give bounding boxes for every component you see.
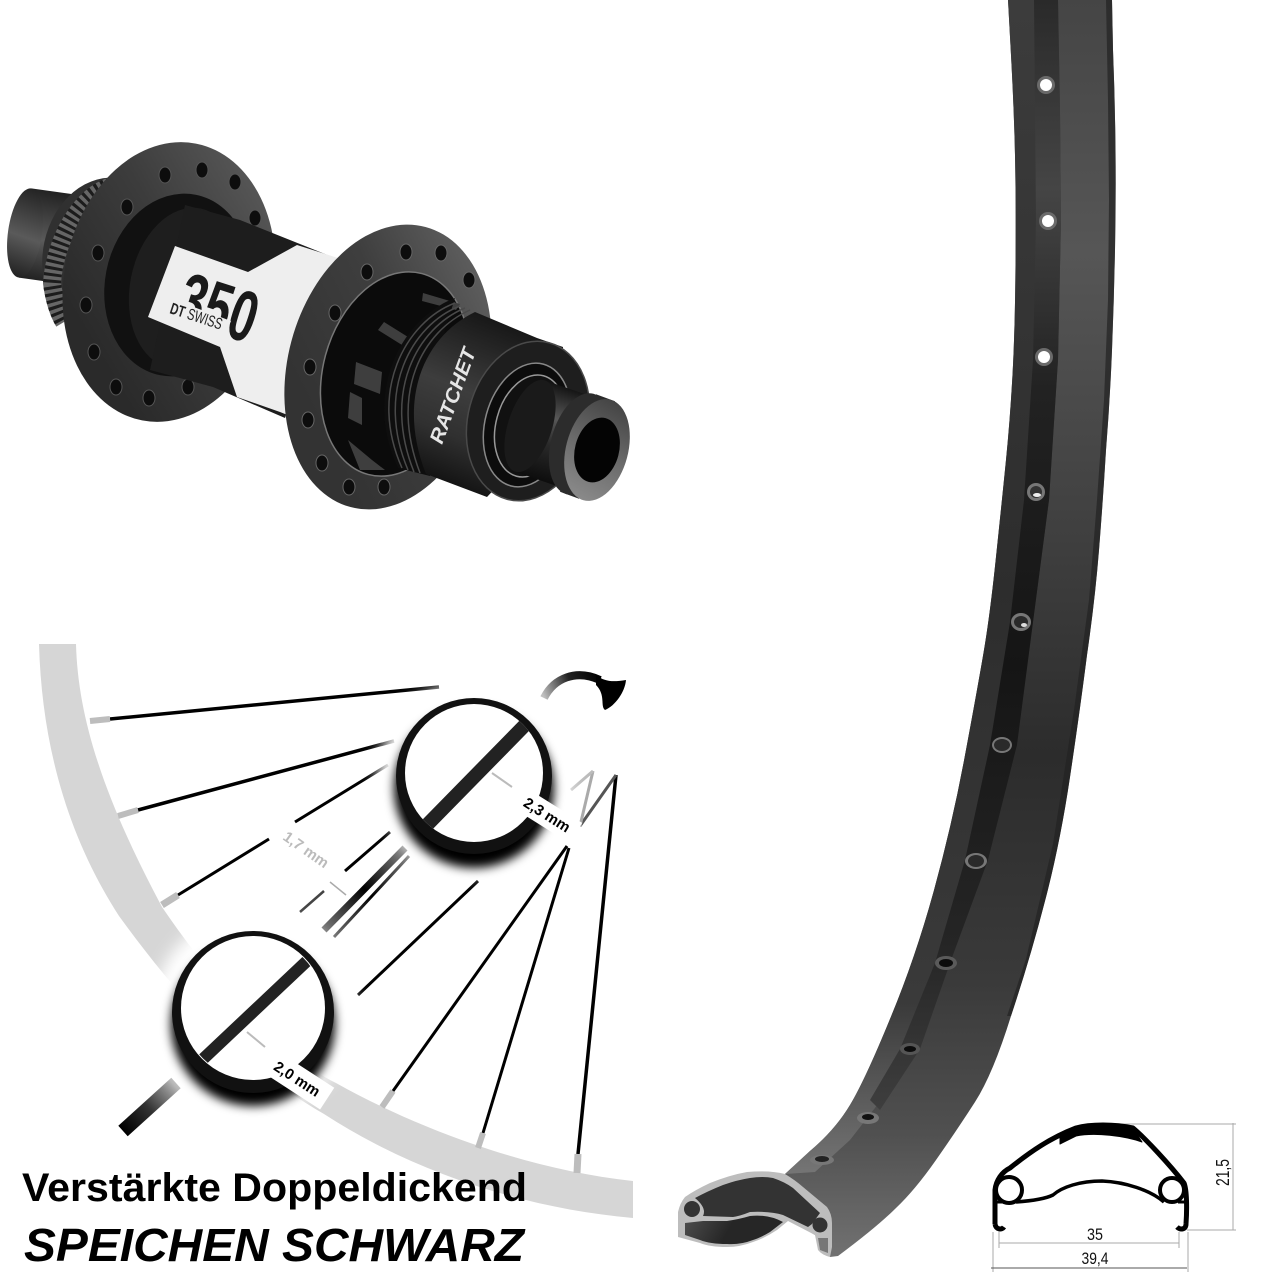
hub axle end left: [2, 186, 75, 280]
magnifier lens 2,0 mm: [171, 931, 335, 1110]
zigzag spoke bend: [571, 771, 616, 826]
hub barrel: [150, 205, 335, 418]
spokes: [90, 687, 616, 1173]
spoke 5: [382, 846, 567, 1107]
rim cross section: [678, 1171, 832, 1257]
rim left flank: [785, 0, 1061, 1174]
dimension 21,5: 21,5: [1213, 1159, 1233, 1186]
fade halos: [153, 682, 570, 1112]
logo 350: 350: [168, 257, 268, 358]
spoke thin section: [300, 832, 390, 912]
label 1,7 mm: 1,7 mm: [280, 828, 332, 872]
rim spoke holes: [810, 76, 1057, 1165]
freehub body: [384, 298, 563, 497]
spoke 3: [162, 765, 388, 905]
rim right edge: [1007, 0, 1116, 1016]
label 2,0 mm: [260, 1048, 334, 1110]
grey rim arc: [39, 644, 633, 1218]
label 2,3 mm: [512, 787, 582, 843]
freehub pawl ring: [299, 255, 491, 493]
label 2,3 mm: 2,3 mm: [520, 795, 573, 836]
spoke diagram: [39, 644, 633, 1218]
axle tube: [494, 374, 640, 508]
spoke 4: [358, 881, 478, 995]
label 2,0 mm: 2,0 mm: [270, 1058, 323, 1101]
rim photo: [678, 0, 1116, 1257]
threaded spoke end: [123, 1083, 176, 1131]
white sleeve with logo: [148, 245, 338, 420]
right flange: [254, 201, 522, 533]
left flange: [39, 124, 299, 440]
magnifier lens 2,3 mm: [394, 698, 582, 868]
heading: SPEICHEN SCHWARZ: SPEICHEN SCHWARZ: [24, 1219, 526, 1271]
spoke thick section: [324, 848, 409, 937]
rim body: [785, 0, 1116, 1257]
rim profile technical drawing: [991, 1123, 1236, 1272]
centerlock splined ring: [28, 166, 182, 344]
dimension 39,4: 39,4: [1082, 1249, 1108, 1268]
RATCHET label: RATCHET: [426, 343, 482, 447]
spoke 7: [577, 775, 616, 1173]
profile outline: [995, 1124, 1187, 1229]
logo DT SWISS: DT SWISS: [168, 301, 224, 333]
dimension lines: [991, 1123, 1236, 1272]
heading: Verstärkte Doppeldickend: Verstärkte Doppeldickend: [22, 1166, 527, 1210]
hub photo: [2, 124, 640, 533]
end cap bearing: [449, 327, 607, 515]
spoke head elbow: [544, 675, 626, 710]
spoke 2: [118, 741, 394, 816]
rim spoke channel: [870, 0, 1061, 1110]
spoke 6: [478, 848, 569, 1148]
spoke 1: [90, 687, 439, 721]
dimension 35: 35: [1087, 1225, 1103, 1244]
